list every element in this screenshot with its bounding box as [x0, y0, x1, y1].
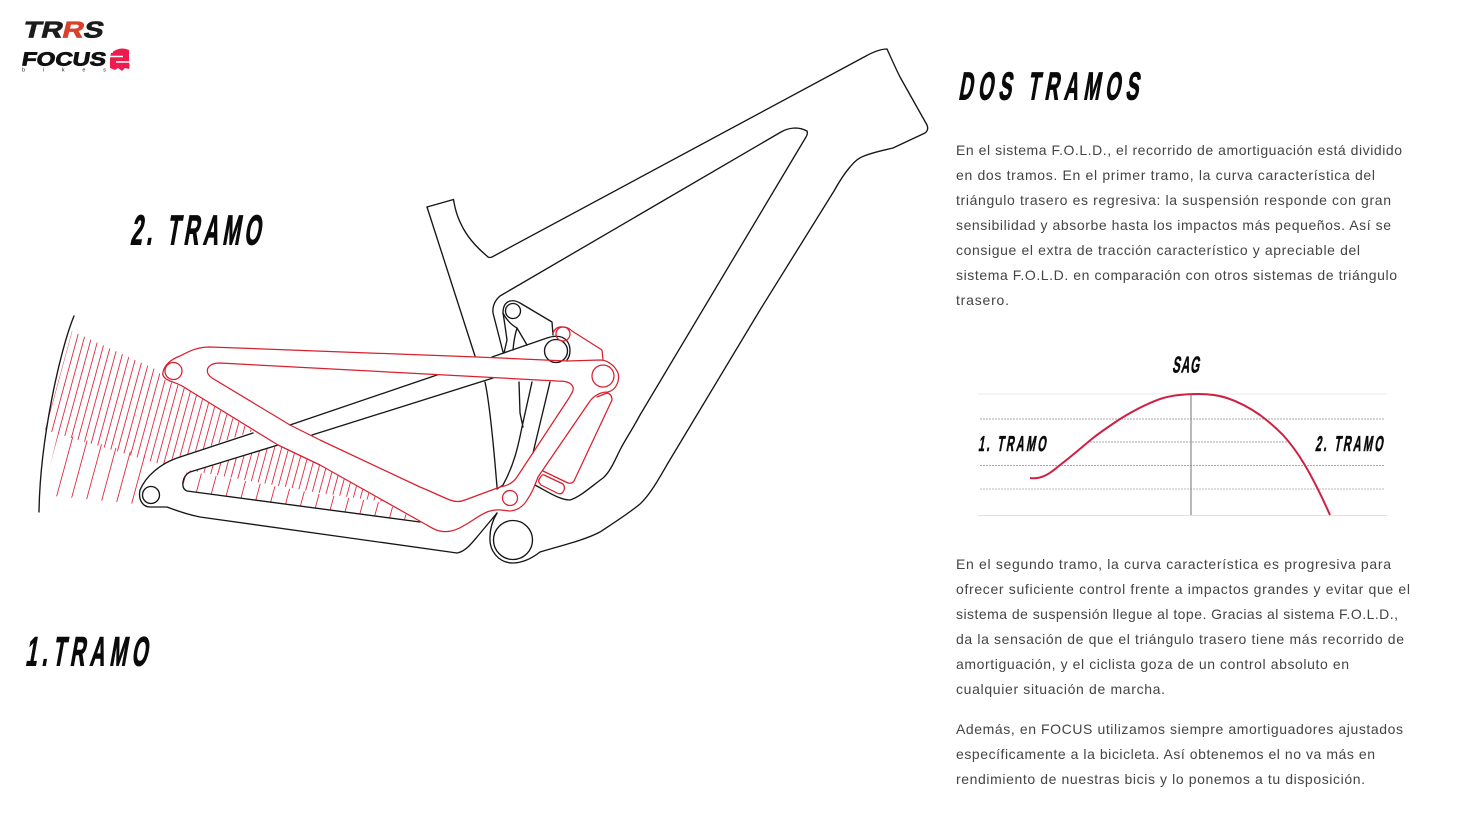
text block: third paragraph [956, 721, 1403, 787]
logo: TRRS and Focus Bikes [20, 17, 130, 74]
chart grid lines [978, 394, 1387, 516]
chainstay pivot [142, 486, 160, 504]
text block: second paragraph [956, 556, 1410, 697]
text block: intro paragraph [956, 142, 1402, 308]
heading: dos tramos: DOS TRAMOS [956, 65, 1144, 108]
swingarm: red outline [163, 347, 619, 532]
text block: second paragraph: da la sensación de que el triángulo trasero tiene más recorrido de [956, 631, 1404, 647]
text block: third paragraph: Además, en FOCUS utilizamos siempre amortiguadores ajustados [956, 721, 1403, 737]
text block: intro paragraph: En el sistema F.O.L.D., el recorrido de amortiguación está dividido [956, 142, 1402, 158]
main frame: outer outline [427, 49, 928, 563]
text block: intro paragraph: consigue el extra de tracción característico y apreciable del [956, 242, 1360, 258]
logo text: FOCUS: FOCUS [20, 50, 108, 70]
chart label: 2. tramo: 2. TRAMO [1314, 431, 1386, 456]
hatching: travel range, fine lines [45, 331, 382, 502]
shock absorber: red [543, 393, 612, 483]
text block: intro paragraph: trasero. [956, 292, 1009, 308]
red pivots [165, 362, 614, 506]
shock body block: red [539, 475, 564, 494]
chart: suspension curve [977, 351, 1387, 516]
logo text: TRRS: TRRS [21, 17, 107, 42]
text block: intro paragraph: sistema F.O.L.D. en comparación con otros sistemas de triángulo [956, 267, 1397, 283]
arc: wheel path [39, 316, 74, 512]
bottom bracket circle [494, 520, 532, 560]
text block: second paragraph: cualquier situación de marcha. [956, 681, 1165, 697]
label: 1. tramo: 1.TRAMO [23, 628, 154, 674]
text block: intro paragraph: triángulo trasero es regresiva: la suspensión responde con gran [956, 192, 1391, 208]
main frame: seat tube [427, 207, 497, 487]
rocker link: black [503, 301, 568, 362]
text block: third paragraph: específicamente a la bicicleta. Así obtenemos el no va más en [956, 746, 1375, 762]
swingarm: red inner window [207, 363, 573, 502]
suspension frame diagram [15, 49, 928, 563]
text block: second paragraph: En el segundo tramo, la curva característica es progresiva para [956, 556, 1391, 572]
logo icon: red emblem [110, 49, 130, 71]
text block: second paragraph: sistema de suspensión llegue al tope. Gracias al sistema F.O.L.D., [956, 606, 1398, 622]
text block: second paragraph: ofrecer suficiente control frente a impactos grandes y evitar que el [956, 581, 1410, 597]
main frame: triangle window [493, 128, 807, 500]
chart SAG marker line [1190, 394, 1192, 515]
text block: third paragraph: rendimiento de nuestras bicis y lo ponemos a tu disposición. [956, 771, 1365, 787]
text block: intro paragraph: en dos tramos. En el primer tramo, la curva característica del [956, 167, 1375, 183]
rear link: red [553, 327, 603, 360]
text block: intro paragraph: sensibilidad y absorbe hasta los impactos más pequeños. Así se [956, 217, 1391, 233]
hatching: travel range, wide lines [48, 433, 406, 520]
chainstay: black rear triangle [140, 375, 497, 553]
label: 2. tramo: 2. TRAMO [128, 208, 266, 254]
chart label: SAG: SAG [1171, 351, 1203, 377]
logo text: bikes: bikes [22, 68, 106, 74]
text block: second paragraph: amortiguación, y el ciclista goza de un control absoluto en [956, 656, 1349, 672]
rear pivot: red [556, 327, 570, 341]
chart curve [1030, 394, 1330, 515]
struts: black [497, 382, 550, 489]
chart label: 1. tramo: 1. TRAMO [977, 431, 1049, 456]
